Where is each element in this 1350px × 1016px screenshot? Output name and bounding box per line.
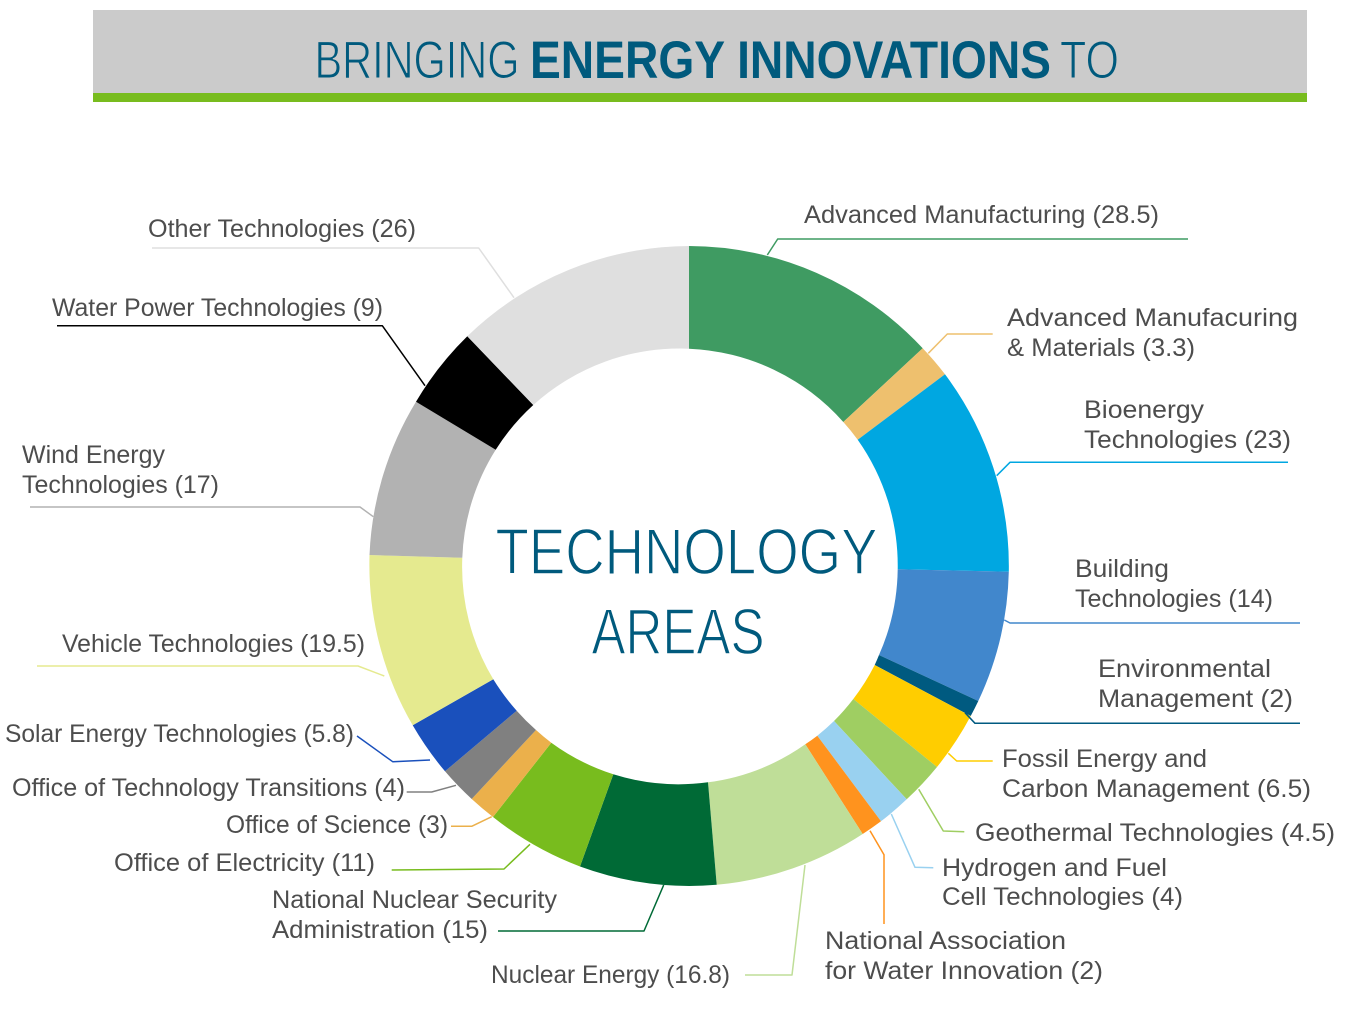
segment: Building Technologies [879,569,1009,701]
segment: Office of Science [472,730,551,817]
label: Geothermal Technologies [919,789,1335,847]
label: Wind Energy Technologies [22,441,373,517]
label: Geothermal Technologies: Geothermal Technologies (4.5) [975,819,1335,847]
header banner [93,10,1307,102]
label: National Nuclear Security Administration: Administration (15) [272,916,488,944]
label: Building Technologies: Building [1075,555,1169,583]
label: Office of Electricity: Office of Electricity (11) [114,849,375,877]
label: Nuclear Energy: Nuclear Energy (16.8) [491,961,730,989]
label: Fossil Energy and Carbon Management: Carbon Management (6.5) [1002,775,1311,803]
label: Advanced Manufacuring and Materials: Advanced Manufacuring [1007,304,1298,332]
label: Fossil Energy and Carbon Management: Fossil Energy and [1002,745,1207,773]
label: National Nuclear Security Administration [272,885,664,944]
label: Hydrogen and Fuel Cell Technologies: Cell Technologies (4) [942,883,1183,911]
label: Wind Energy Technologies: Technologies (17) [22,471,219,499]
label: Fossil Energy and Carbon Management [948,745,1311,803]
label: Advanced Manufacuring and Materials: & Materials (3.3) [1007,334,1195,362]
segment: National Association for Water Innovation [805,736,881,834]
label: National Association for Water Innovation: National Association [825,927,1066,955]
label: Solar Energy Technologies [5,720,430,762]
segment: Other Technologies [467,246,689,405]
segment: Bioenergy Technologies [858,374,1009,572]
segment: Environmental Management [875,655,978,716]
label: Vehicle Technologies: Vehicle Technologies (19.5) [62,630,365,658]
centre heading [496,515,878,668]
segment: Vehicle Technologies [369,555,493,725]
label: Bioenergy Technologies: Bioenergy [1084,396,1205,424]
label: Environmental Management: Management (2) [1098,685,1293,713]
label: National Association for Water Innovation: for Water Innovation (2) [825,957,1103,985]
label: Advanced Manufacturing: Advanced Manufacturing (28.5) [804,201,1159,229]
segment: Advanced Manufacturing [689,246,923,422]
label: National Nuclear Security Administration: National Nuclear Security [272,886,557,914]
centre heading: AREAS [592,595,764,668]
label: Hydrogen and Fuel Cell Technologies: Hydrogen and Fuel [942,854,1167,882]
segment: Solar Energy Technologies [413,679,517,771]
segment: Geothermal Technologies [834,699,937,799]
label: Vehicle Technologies [37,630,384,676]
title: BRINGING [314,31,520,90]
segment: Nuclear Energy [708,744,863,885]
segment: Office of Technology Transitions [445,711,536,799]
donut chart: technology areas [369,246,1009,886]
label: Environmental Management: Environmental [1098,655,1271,683]
label: Office of Science: Office of Science (3) [226,811,448,839]
label: National Association for Water Innovation [825,831,1103,985]
label: Building Technologies: Technologies (14) [1075,585,1273,613]
label: Bioenergy Technologies: Technologies (23) [1084,426,1291,454]
label: Hydrogen and Fuel Cell Technologies [891,814,1183,911]
label: Other Technologies: Other Technologies (26) [148,215,416,243]
label: Water Power Technologies: Water Power Technologies (9) [52,294,383,322]
segment: Office of Electricity [493,743,613,866]
label: Water Power Technologies [52,294,425,386]
label: Wind Energy Technologies: Wind Energy [22,441,165,469]
segment: National Nuclear Security Administration [580,774,717,886]
label: Advanced Manufacuring and Materials [928,304,1298,362]
label: Nuclear Energy [491,865,805,989]
centre heading: TECHNOLOGY [496,515,878,588]
label: Advanced Manufacturing [767,201,1188,255]
label: Bioenergy Technologies [997,396,1291,476]
segment: Advanced Manufacuring and Materials [843,348,945,440]
label: Office of Technology Transitions: Office of Technology Transitions (4) [12,774,405,802]
label: Office of Electricity [114,844,530,877]
title: TO [1060,31,1119,90]
title: ENERGY INNOVATIONS [530,31,1051,90]
label: Environmental Management [965,655,1300,723]
segment: Water Power Technologies [416,336,533,450]
segment: Wind Energy Technologies [370,402,496,558]
label: Building Technologies [1004,555,1300,623]
label: Solar Energy Technologies: Solar Energy Technologies (5.8) [5,720,354,748]
label: Other Technologies [148,215,514,298]
segment: Hydrogen and Fuel Cell Technologies [817,721,907,821]
segment: Fossil Energy and Carbon Management [853,665,971,767]
